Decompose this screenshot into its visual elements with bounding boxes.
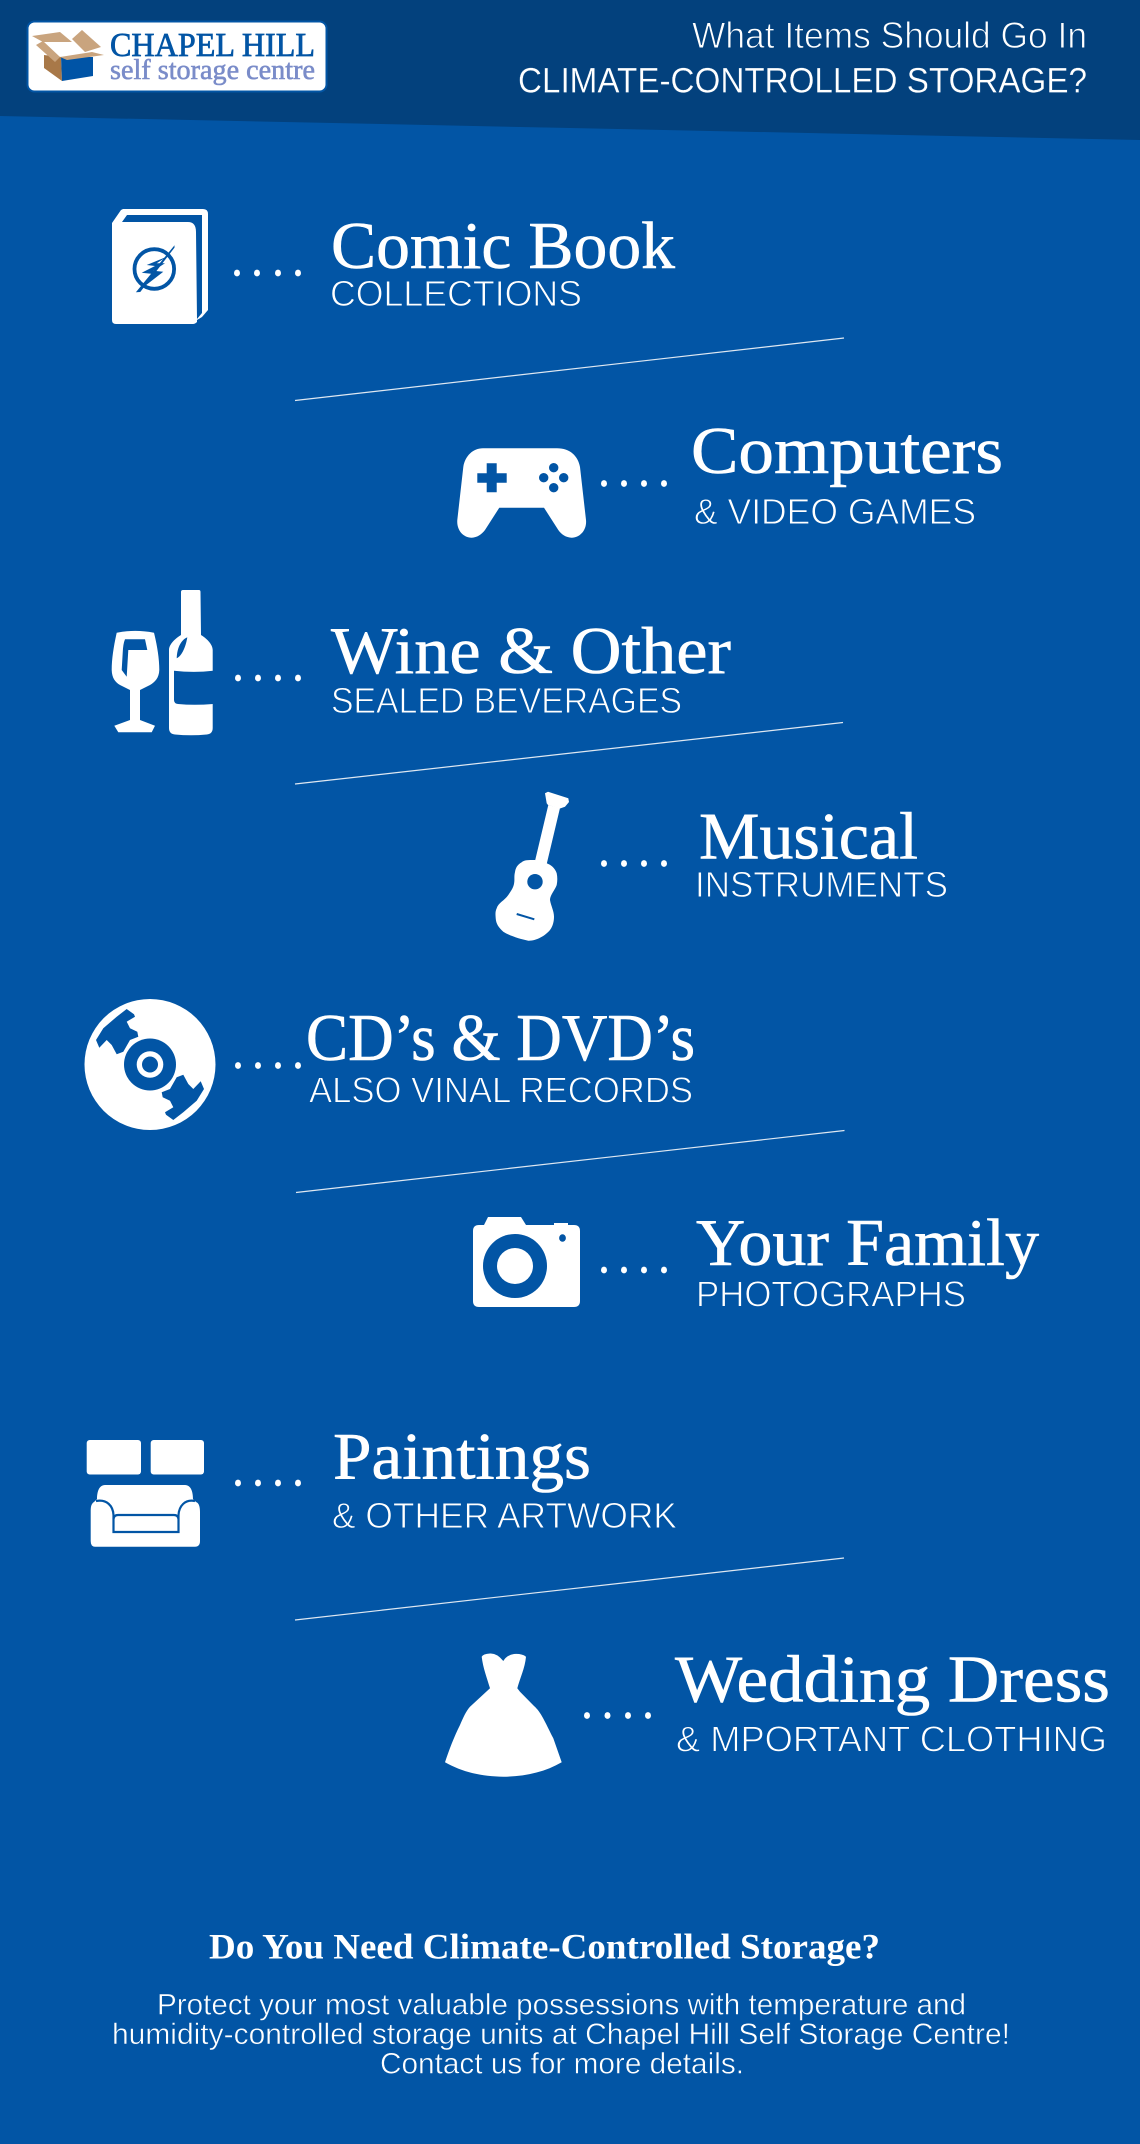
closing heading: Do You Need Climate-Controlled Storage?	[209, 1926, 880, 1966]
logo: self storage centre	[110, 54, 315, 86]
item: comic book	[112, 209, 675, 324]
subheading: & MPORTANT CLOTHING	[676, 1718, 1107, 1760]
heading: Wine & Other	[331, 614, 731, 688]
closing text: humidity-controlled storage units at Chapel Hill Self Storage Centre!	[112, 2018, 1010, 2051]
heading: Comic Book	[331, 209, 675, 283]
icon: comic book	[112, 209, 208, 324]
item: wedding dress	[445, 1642, 1110, 1777]
title	[518, 15, 1087, 100]
title: CLIMATE-CONTROLLED STORAGE?	[518, 62, 1087, 100]
heading: Paintings	[333, 1420, 591, 1494]
subheading: COLLECTIONS	[330, 273, 582, 314]
subheading: PHOTOGRAPHS	[696, 1274, 966, 1314]
icon: disc	[84, 999, 216, 1130]
item: wine	[112, 590, 731, 735]
item: CDs and DVDs	[84, 999, 695, 1130]
item: musical instruments	[495, 792, 948, 941]
icon: game controller	[457, 448, 586, 538]
logo	[28, 22, 326, 92]
dotted leader	[601, 480, 667, 487]
heading: Musical	[699, 800, 918, 874]
logo: CHAPEL HILL	[110, 27, 315, 64]
heading: Your Family	[696, 1206, 1039, 1280]
item: paintings	[87, 1420, 677, 1547]
item: family photographs	[473, 1206, 1039, 1314]
subheading: ALSO VINAL RECORDS	[309, 1070, 693, 1110]
header band	[0, 0, 1140, 140]
dotted leader	[601, 1267, 667, 1273]
dotted leader	[601, 860, 667, 867]
dotted leader	[235, 1480, 301, 1486]
dotted leader	[235, 675, 301, 681]
closing text: Contact us for more details.	[380, 2048, 744, 2080]
subheading: & VIDEO GAMES	[694, 491, 976, 532]
subheading: SEALED BEVERAGES	[331, 680, 682, 721]
icon: paintings above sofa	[87, 1440, 204, 1547]
subheading: INSTRUMENTS	[695, 864, 948, 905]
subheading: & OTHER ARTWORK	[332, 1495, 677, 1536]
title: What Items Should Go In	[692, 15, 1087, 56]
icon: dress	[445, 1653, 562, 1777]
closing text	[112, 1988, 1010, 2080]
icon: camera	[473, 1217, 580, 1307]
dotted leader	[234, 270, 301, 276]
heading: CD’s & DVD’s	[306, 1001, 695, 1075]
dotted leader	[584, 1712, 651, 1719]
heading: Computers	[691, 414, 1003, 488]
item: computers	[457, 414, 1003, 538]
heading: Wedding Dress	[675, 1642, 1110, 1716]
closing text: Protect your most valuable possessions with temperature and	[157, 1988, 966, 2022]
dotted leader	[235, 1062, 301, 1069]
icon: wine glass and bottle	[112, 590, 213, 735]
icon: guitar	[495, 792, 569, 941]
